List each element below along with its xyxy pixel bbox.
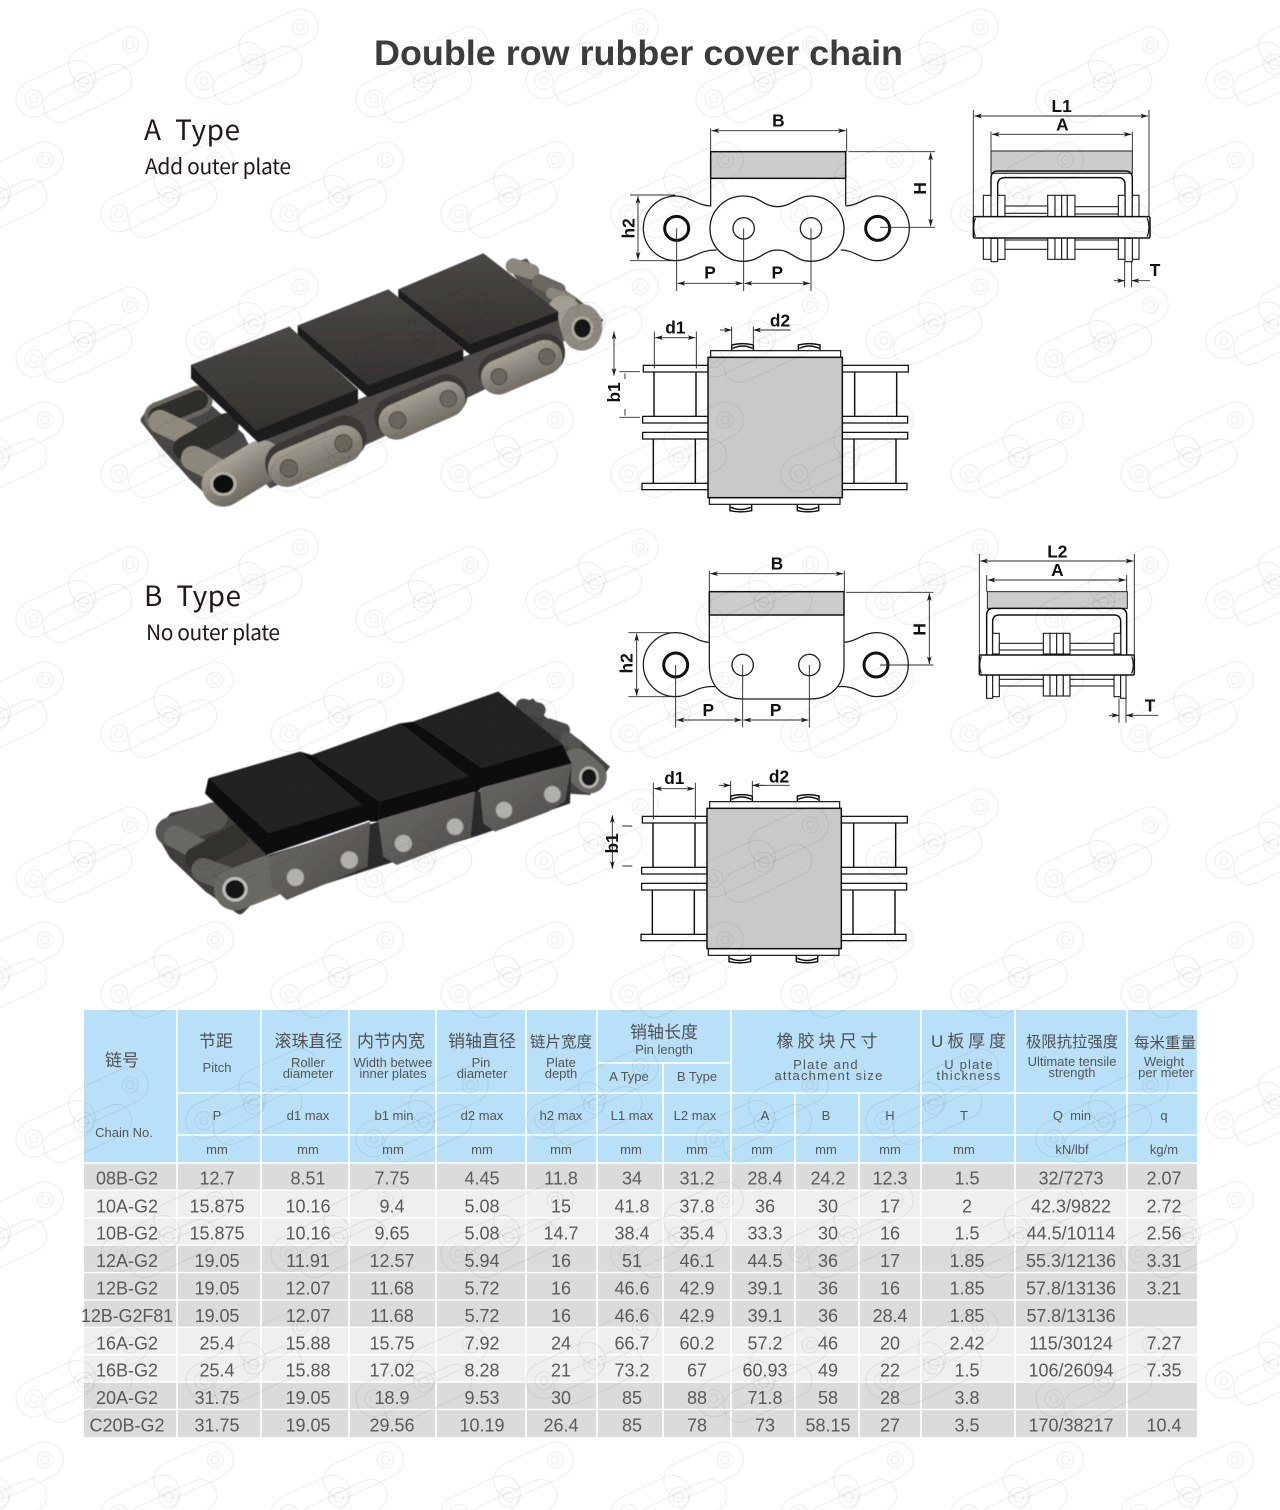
- row 10B-G2: 10B-G2: [96, 1224, 158, 1244]
- row 12B-G2: 42.9: [679, 1278, 715, 1298]
- row 12B-G2F81: 28.4: [873, 1306, 907, 1326]
- dimension lines: [973, 110, 1149, 287]
- U plate: [987, 608, 1127, 698]
- pin: [979, 655, 1134, 675]
- row 12A-G2: 44.5: [747, 1251, 783, 1271]
- attachment body: [709, 615, 844, 699]
- row 20A-G2: 71.8: [747, 1388, 783, 1408]
- row 20A-G2: 88: [687, 1388, 707, 1408]
- header: symbol row: d1 max: [287, 1108, 330, 1123]
- row 12A-G2: 46.1: [679, 1251, 715, 1271]
- row 12B-G2: 1.85: [949, 1278, 985, 1298]
- header: first row Chinese and English titles: inner plates: [359, 1066, 427, 1081]
- header: unit row: kg/m: [1150, 1142, 1178, 1157]
- row 12B-G2: 39.1: [747, 1278, 783, 1298]
- dimension labels: b1: [602, 833, 622, 853]
- header: first row Chinese and English titles: 滚珠直径: [274, 1032, 342, 1051]
- title: Double row rubber cover chain: [374, 34, 903, 73]
- photo: B type chain: [160, 692, 610, 910]
- row 10B-G2: 15.875: [189, 1224, 245, 1244]
- row 08B-G2: 1.5: [954, 1168, 980, 1188]
- row C20B-G2: 27: [880, 1416, 900, 1436]
- U plate: [991, 171, 1132, 217]
- row 16A-G2: 66.7: [614, 1334, 650, 1354]
- table header background: [84, 1010, 1197, 1163]
- header: first row Chinese and English titles: Plate: [546, 1055, 576, 1070]
- row 16A-G2: 20: [880, 1334, 900, 1354]
- row 12B-G2: 16: [551, 1278, 571, 1298]
- dimension labels: H: [910, 182, 930, 195]
- row 12B-G2F81: 36: [818, 1306, 838, 1326]
- header: symbol row: A: [761, 1108, 770, 1123]
- header: symbol row: q: [1160, 1108, 1168, 1123]
- dimension labels: d1: [665, 318, 686, 338]
- header: first row Chinese and English titles: B Type: [677, 1069, 717, 1084]
- dimension labels: L1: [1052, 96, 1072, 116]
- row 16B-G2: 16B-G2: [96, 1360, 158, 1380]
- header: first row Chinese and English titles: Ultimate tensile: [1028, 1054, 1116, 1069]
- header: symbol row: d2 max: [461, 1108, 504, 1123]
- dimension labels: P: [703, 700, 714, 720]
- plates, pad and pins: [641, 795, 907, 963]
- row 16A-G2: 15.75: [369, 1334, 415, 1354]
- row C20B-G2: 3.5: [954, 1416, 980, 1436]
- row 12B-G2F81: 12B-G2F81: [81, 1306, 173, 1326]
- row 10B-G2: 2.56: [1146, 1224, 1182, 1244]
- specification table: [81, 1010, 1197, 1438]
- diagram: B type side view: [979, 541, 1158, 723]
- row 12A-G2: 12.57: [369, 1251, 415, 1271]
- row 10A-G2: 17: [880, 1196, 900, 1216]
- header: unit row: mm: [471, 1142, 493, 1157]
- dimension labels: H: [910, 623, 930, 636]
- row 20A-G2: 18.9: [374, 1388, 410, 1408]
- row 12A-G2: 3.31: [1146, 1251, 1182, 1271]
- row 12B-G2F81: 46.6: [615, 1306, 649, 1326]
- row 12A-G2: 11.91: [286, 1251, 330, 1271]
- header: first row Chinese and English titles: Pin length: [635, 1042, 693, 1057]
- dimension labels: d2: [770, 310, 790, 330]
- header: first row Chinese and English titles: 链号: [105, 1051, 139, 1070]
- row 12B-G2: 3.21: [1146, 1278, 1182, 1298]
- dimension labels: T: [1150, 260, 1161, 280]
- dimension labels: d2: [769, 767, 789, 787]
- pins: [280, 349, 555, 477]
- row 20A-G2: 28: [880, 1388, 900, 1408]
- header: first row Chinese and English titles: Roller: [291, 1055, 326, 1070]
- pin: [973, 217, 1150, 238]
- dimension labels: [619, 111, 930, 283]
- row 16A-G2: 16A-G2: [96, 1334, 158, 1354]
- row 12B-G2: 12B-G2: [96, 1278, 158, 1298]
- row 16A-G2: 25.4: [199, 1334, 235, 1354]
- row 16B-G2: 73.2: [614, 1360, 650, 1380]
- dark side band under pads: [257, 318, 565, 488]
- row 16B-G2: 49: [818, 1360, 838, 1380]
- row C20B-G2: 58.15: [805, 1416, 851, 1436]
- header: symbol row: L2 max: [674, 1108, 717, 1123]
- row 16A-G2: 24: [551, 1334, 571, 1354]
- row 10A-G2: 15.875: [189, 1196, 245, 1216]
- row 10B-G2: 33.3: [747, 1224, 783, 1244]
- dimension labels: A: [1051, 560, 1064, 580]
- row 16B-G2: 25.4: [199, 1360, 235, 1380]
- row 10A-G2: 10A-G2: [96, 1196, 158, 1216]
- rear rollers and plate at right end: [513, 266, 582, 327]
- dimension labels: [1047, 541, 1156, 715]
- row 16B-G2: 15.88: [285, 1360, 331, 1380]
- dark backing behind plates: [268, 763, 572, 897]
- row 16B-G2: 17.02: [369, 1360, 415, 1380]
- header: first row Chinese and English titles: Plate and: [793, 1057, 859, 1072]
- header: unit row: kN/lbf: [1055, 1142, 1089, 1157]
- row 16B-G2: 22: [880, 1360, 900, 1380]
- dimension labels: b1: [604, 382, 624, 402]
- dimension labels: d1: [664, 768, 685, 788]
- dimension labels: [616, 554, 930, 720]
- dimension labels: h2: [616, 653, 636, 673]
- row 10A-G2: 9.4: [379, 1196, 405, 1216]
- header: symbol row: L1 max: [611, 1108, 654, 1123]
- dimension labels: L2: [1047, 541, 1067, 561]
- row 12B-G2: 57.8/13136: [1026, 1278, 1116, 1298]
- row 20A-G2: 85: [622, 1388, 642, 1408]
- inner plate: [710, 196, 844, 261]
- holes: [665, 216, 689, 240]
- header: unit row: mm: [382, 1142, 404, 1157]
- row C20B-G2: 31.75: [194, 1416, 240, 1436]
- header: unit row: mm: [550, 1142, 572, 1157]
- pins: [286, 786, 561, 886]
- header: first row Chinese and English titles: 每米重量: [1134, 1034, 1196, 1052]
- row C20B-G2: 10.19: [459, 1416, 505, 1436]
- row 12A-G2: 51: [622, 1251, 642, 1271]
- row 08B-G2: 24.2: [810, 1168, 846, 1188]
- row 12B-G2F81: 1.85: [950, 1306, 984, 1326]
- row 12B-G2F81: 57.8/13136: [1026, 1306, 1116, 1326]
- dimension lines: [628, 571, 933, 727]
- row 12A-G2: 12A-G2: [96, 1251, 158, 1271]
- row 12B-G2: 16: [880, 1278, 900, 1298]
- row 12B-G2F81: 11.68: [370, 1306, 414, 1326]
- row 12A-G2: 1.85: [949, 1251, 985, 1271]
- row 16B-G2: 8.28: [464, 1360, 500, 1380]
- row 12A-G2: 16: [551, 1251, 571, 1271]
- diagram: B type front view: [616, 554, 933, 727]
- row 12A-G2: 19.05: [194, 1251, 240, 1271]
- header: unit row: mm: [620, 1142, 642, 1157]
- row 16A-G2: 60.2: [679, 1334, 715, 1354]
- header: first row Chinese and English titles: thickness: [936, 1068, 1002, 1083]
- row 12B-G2: 19.05: [194, 1278, 240, 1298]
- row C20B-G2: 85: [622, 1416, 642, 1436]
- dark backing at right end: [507, 258, 603, 347]
- row 12A-G2: 5.94: [464, 1251, 500, 1271]
- header: first row Chinese and English titles: 销轴直径: [448, 1032, 516, 1051]
- row 16B-G2: 60.93: [742, 1360, 788, 1380]
- row 08B-G2: 12.3: [872, 1168, 908, 1188]
- dimension lines: [630, 128, 935, 291]
- holes: [664, 653, 688, 677]
- row 12B-G2F81: 16: [551, 1306, 571, 1326]
- plates, pad and pins: [642, 344, 908, 512]
- row 12B-G2F81: 39.1: [748, 1306, 782, 1326]
- header: first row Chinese and English titles: 节距: [199, 1032, 233, 1051]
- dimension labels: [602, 767, 789, 853]
- header: first row Chinese and English titles: diameter: [283, 1066, 334, 1081]
- row 16A-G2: 115/30124: [1029, 1334, 1113, 1354]
- plates and rollers: [987, 633, 1126, 698]
- header: symbol row: B: [822, 1108, 830, 1123]
- diagram: A type top view: [604, 310, 908, 512]
- table row stripes: [84, 1164, 1197, 1437]
- header: first row Chinese and English titles: 内节内宽: [357, 1032, 425, 1051]
- row 08B-G2: 7.75: [374, 1168, 410, 1188]
- row 12B-G2: 5.72: [464, 1278, 500, 1298]
- row 12B-G2F81: 5.72: [465, 1306, 499, 1326]
- row 10B-G2: 35.4: [679, 1224, 715, 1244]
- header: first row Chinese and English titles: A Type: [609, 1069, 649, 1084]
- header: unit row: mm: [206, 1142, 228, 1157]
- row 16A-G2: 46: [818, 1334, 838, 1354]
- header: symbol row: b1 min: [374, 1108, 414, 1123]
- row 10B-G2: 10.16: [285, 1224, 331, 1244]
- row 20A-G2: 30: [551, 1388, 571, 1408]
- row C20B-G2: 19.05: [285, 1416, 331, 1436]
- dimension labels: B: [771, 554, 783, 574]
- heading: A Type: A Type: [144, 109, 240, 149]
- row 12B-G2: 11.68: [370, 1278, 414, 1298]
- dimension labels: [604, 310, 790, 402]
- row 20A-G2: 9.53: [464, 1388, 500, 1408]
- dimension labels: P: [704, 263, 716, 283]
- row 08B-G2: 08B-G2: [96, 1168, 158, 1188]
- row 16B-G2: 67: [687, 1360, 707, 1380]
- row 20A-G2: 31.75: [194, 1388, 240, 1408]
- row 10A-G2: 10.16: [285, 1196, 331, 1216]
- header: symbol row: Q min: [1053, 1108, 1091, 1123]
- row 16B-G2: 1.5: [954, 1360, 980, 1380]
- row 16A-G2: 7.92: [464, 1334, 500, 1354]
- header: unit row: mm: [297, 1142, 319, 1157]
- dark backing at left end: [160, 807, 267, 910]
- row 16B-G2: 106/26094: [1028, 1360, 1114, 1380]
- dimension lines: [619, 327, 791, 417]
- row 16B-G2: 21: [551, 1360, 571, 1380]
- row 16A-G2: 15.88: [285, 1334, 331, 1354]
- rubber covers: [413, 692, 572, 788]
- row 08B-G2: 32/7273: [1038, 1168, 1104, 1188]
- row C20B-G2: 170/38217: [1028, 1416, 1114, 1436]
- header: first row Chinese and English titles: Width betwee: [354, 1055, 432, 1070]
- row C20B-G2: 10.4: [1146, 1416, 1182, 1436]
- header: first row Chinese and English titles: per meter: [1138, 1065, 1194, 1080]
- dimension labels: P: [770, 700, 781, 720]
- row 12B-G2F81: 42.9: [680, 1306, 714, 1326]
- row 10A-G2: 2.72: [1146, 1196, 1182, 1216]
- row 08B-G2: 4.45: [464, 1168, 500, 1188]
- row 16A-G2: 7.27: [1146, 1334, 1182, 1354]
- header: unit row: mm: [751, 1142, 773, 1157]
- header: first row Chinese and English titles: 链片宽度: [530, 1033, 592, 1051]
- row 12A-G2: 17: [880, 1251, 900, 1271]
- header: first row Chinese and English titles: Weight: [1144, 1054, 1184, 1069]
- row 08B-G2: 11.8: [544, 1168, 578, 1188]
- header: first row Chinese and English titles: Pin: [472, 1055, 490, 1070]
- row 10A-G2: 2: [962, 1196, 972, 1216]
- row 12B-G2: 12.07: [285, 1278, 331, 1298]
- row 20A-G2: 19.05: [285, 1388, 331, 1408]
- rubber pad and attachment: [711, 152, 846, 178]
- dark gaps between covers: [300, 722, 482, 822]
- heading: B Type: [144, 575, 280, 647]
- dimension labels: h2: [619, 218, 639, 238]
- header: first row Chinese and English titles: depth: [545, 1066, 577, 1081]
- header: first row Chinese and English titles: strength: [1049, 1065, 1095, 1080]
- row 08B-G2: 2.07: [1146, 1168, 1182, 1188]
- steel side plates: [480, 763, 572, 832]
- rubber pad: [987, 592, 1127, 608]
- left end rollers: [170, 817, 268, 889]
- row 10B-G2: 9.65: [374, 1224, 410, 1244]
- dimension lines: [979, 554, 1134, 723]
- header: unit row: mm: [879, 1142, 901, 1157]
- diagram: A type front view: [619, 111, 935, 291]
- row 20A-G2: 20A-G2: [96, 1388, 158, 1408]
- row 10A-G2: 42.3/9822: [1031, 1196, 1111, 1216]
- row C20B-G2: 78: [687, 1416, 707, 1436]
- row 12B-G2: 46.6: [614, 1278, 650, 1298]
- dimension labels: B: [772, 111, 785, 131]
- photo: A type chain: [145, 253, 603, 502]
- outer plate lobes: [643, 633, 715, 697]
- row C20B-G2: 26.4: [543, 1416, 579, 1436]
- row C20B-G2: C20B-G2: [89, 1416, 165, 1436]
- row C20B-G2: 73: [755, 1416, 775, 1436]
- rubber pad: [991, 151, 1132, 173]
- header: first row Chinese and English titles: diameter: [457, 1066, 508, 1081]
- heading: A Type: [144, 109, 291, 181]
- row 10A-G2: 30: [818, 1196, 838, 1216]
- header: first row Chinese and English titles: 橡胶块尺寸: [776, 1032, 882, 1051]
- dimension labels: P: [772, 263, 783, 283]
- header: first row Chinese and English titles: [95, 1023, 1196, 1140]
- subheading: Add outer plate: Add outer plate: [145, 151, 291, 181]
- row 10B-G2: 1.5: [954, 1224, 980, 1244]
- dark backing at left end: [145, 395, 260, 502]
- header: symbol row: T: [960, 1108, 968, 1123]
- header: first row Chinese and English titles: Chain No.: [95, 1125, 153, 1140]
- header: first row Chinese and English titles: 极限抗拉强度: [1026, 1033, 1118, 1051]
- dimension lines: [622, 781, 790, 866]
- row C20B-G2: 29.56: [369, 1416, 415, 1436]
- diagram: B type top view: [602, 767, 907, 963]
- header: unit row: mm: [953, 1142, 975, 1157]
- row 08B-G2: 8.51: [290, 1168, 326, 1188]
- row 08B-G2: 28.4: [747, 1168, 783, 1188]
- header: symbol row: h2 max: [540, 1108, 583, 1123]
- left end rollers: [158, 400, 262, 485]
- row 10B-G2: 16: [880, 1224, 900, 1244]
- header: symbol row: P: [213, 1108, 221, 1123]
- row 20A-G2: 58: [818, 1388, 838, 1408]
- row 10A-G2: 15: [551, 1196, 571, 1216]
- header: first row Chinese and English titles: U plate: [944, 1057, 994, 1072]
- row 12B-G2F81: 19.05: [195, 1306, 239, 1326]
- row 10B-G2: 5.08: [464, 1224, 500, 1244]
- row 10B-G2: 44.5/10114: [1027, 1224, 1115, 1244]
- row 16A-G2: 57.2: [747, 1334, 783, 1354]
- dimension labels: T: [1145, 695, 1156, 715]
- rear rollers and plate at right end: [523, 706, 590, 777]
- plates and rollers: [983, 195, 1139, 262]
- row 10A-G2: 5.08: [464, 1196, 500, 1216]
- row 08B-G2: 12.7: [199, 1168, 235, 1188]
- outer plates: [643, 196, 717, 261]
- header: unit row: mm: [686, 1142, 708, 1157]
- heading: B Type: B Type: [144, 575, 241, 615]
- row 10A-G2: 36: [755, 1196, 775, 1216]
- row 10A-G2: 37.8: [679, 1196, 715, 1216]
- header: first row Chinese and English titles: Pitch: [203, 1060, 231, 1075]
- dimension labels: A: [1056, 115, 1069, 135]
- subheading: No outer plate: No outer plate: [146, 617, 280, 647]
- row 12B-G2: 36: [818, 1278, 838, 1298]
- header: unit row: mm: [815, 1142, 837, 1157]
- row 08B-G2: 34: [622, 1168, 642, 1188]
- row 16B-G2: 7.35: [1146, 1360, 1182, 1380]
- row 10B-G2: 30: [818, 1224, 838, 1244]
- header: first row Chinese and English titles: attachment size: [774, 1068, 884, 1083]
- diagram: A type side view: [973, 96, 1161, 287]
- header: first row Chinese and English titles: 销轴长度: [630, 1023, 698, 1042]
- row 10B-G2: 38.4: [614, 1224, 650, 1244]
- dimension labels: [1052, 96, 1161, 280]
- row 16A-G2: 2.42: [949, 1334, 985, 1354]
- rubber pads: [398, 253, 558, 355]
- row 12A-G2: 55.3/12136: [1026, 1251, 1116, 1271]
- row 12B-G2F81: 12.07: [286, 1306, 330, 1326]
- row 10B-G2: 14.7: [543, 1224, 579, 1244]
- link plates: [287, 353, 545, 468]
- header: symbol row: H: [885, 1108, 895, 1123]
- dark backing at right end: [518, 698, 610, 795]
- rubber pad: [709, 592, 844, 615]
- row 20A-G2: 3.8: [954, 1388, 980, 1408]
- header: first row Chinese and English titles: U 板 厚 度: [931, 1032, 1006, 1051]
- row 10A-G2: 41.8: [614, 1196, 650, 1216]
- row 08B-G2: 31.2: [679, 1168, 715, 1188]
- row 12A-G2: 36: [818, 1251, 838, 1271]
